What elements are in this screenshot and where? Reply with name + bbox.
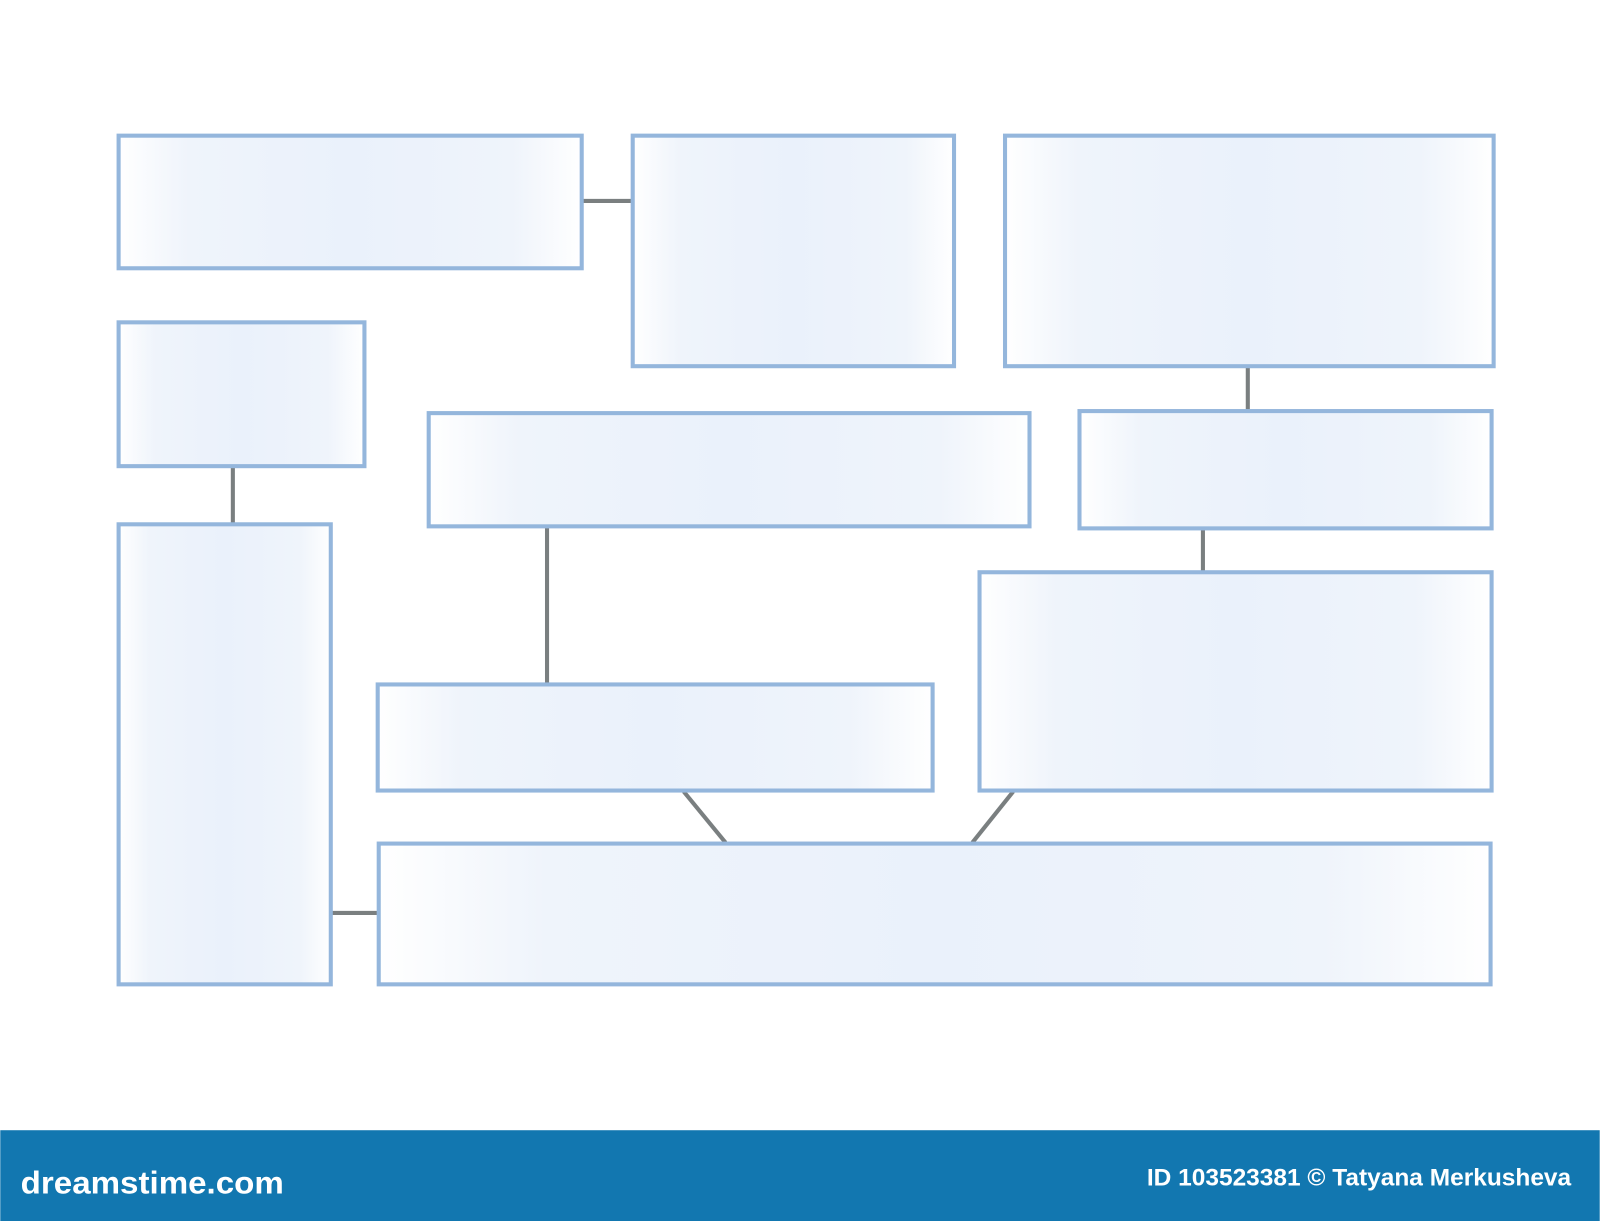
footer logo: dreamstime.com xyxy=(21,1164,284,1200)
box 1 xyxy=(119,136,582,268)
box 7 xyxy=(119,524,331,984)
box 4 xyxy=(119,322,364,466)
box 5 xyxy=(429,413,1030,526)
box 9 xyxy=(980,572,1492,791)
box 6 xyxy=(1079,411,1492,528)
boxes xyxy=(119,136,1494,984)
box 8 xyxy=(378,684,933,791)
footer credit: ID 103523381 © Tatyana Merkusheva xyxy=(1147,1164,1572,1191)
box 3 xyxy=(1005,136,1494,366)
box 10 xyxy=(379,844,1491,984)
connectors xyxy=(233,201,1248,913)
footer bar xyxy=(0,1130,1600,1221)
box 2 xyxy=(633,136,954,366)
